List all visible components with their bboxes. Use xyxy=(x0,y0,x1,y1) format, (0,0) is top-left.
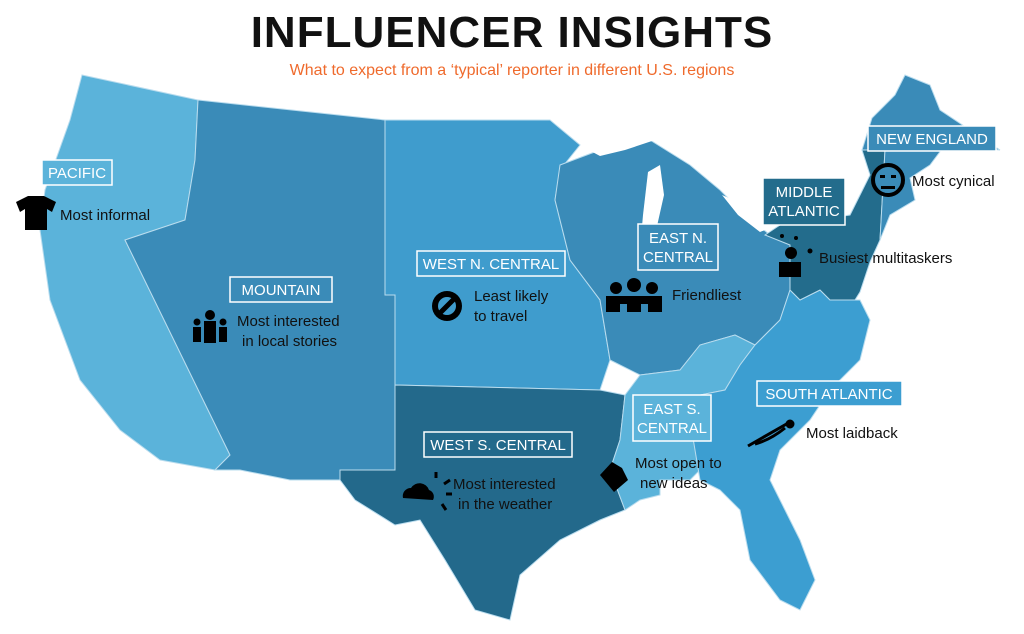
text: middle atlantic: Busiest multitaskers xyxy=(819,250,952,267)
region: east south central xyxy=(610,335,755,510)
label: new england xyxy=(868,126,996,151)
text: new england: Most cynical xyxy=(912,173,995,190)
icon: snapping hand xyxy=(600,462,628,492)
label: west n central xyxy=(417,251,565,276)
text: west n central: Least likely xyxy=(474,288,549,305)
label: west s central: WEST S. CENTRAL xyxy=(430,437,566,454)
label: east n central xyxy=(638,224,718,270)
region: east north central xyxy=(555,140,790,375)
subtitle: What to expect from a ‘typical’ reporter in different U.S. regions xyxy=(290,62,734,79)
label: middle atlantic: MIDDLE xyxy=(776,184,832,201)
map: to travel xyxy=(474,308,527,325)
title: INFLUENCER INSIGHTS xyxy=(251,8,773,57)
region: west north central xyxy=(385,120,610,390)
region: pacific xyxy=(40,75,230,470)
text: east n central: Friendliest xyxy=(672,287,742,304)
icon: shirt xyxy=(16,196,56,230)
label: mountain: MOUNTAIN xyxy=(242,282,320,299)
text: west s central: Most interested xyxy=(453,476,556,493)
label: east s central xyxy=(633,395,711,441)
text: pacific: Most informal xyxy=(60,207,150,224)
text: east s central: Most open to xyxy=(635,455,722,472)
icon: hammock xyxy=(748,421,793,446)
label: east s central: CENTRAL xyxy=(637,420,707,437)
label: east n central: EAST N. xyxy=(649,230,707,247)
region: new england xyxy=(862,75,1000,240)
label: east s central: EAST S. xyxy=(643,401,701,418)
map: in local stories xyxy=(242,333,337,350)
region: west south central xyxy=(340,385,625,620)
label: south atlantic: SOUTH ATLANTIC xyxy=(765,386,893,403)
label: pacific: PACIFIC xyxy=(48,165,106,182)
icon: people xyxy=(193,310,227,343)
icon: friends xyxy=(606,278,662,312)
label: west n central: WEST N. CENTRAL xyxy=(423,256,559,273)
text: mountain: Most interested xyxy=(237,313,340,330)
text: south atlantic: Most laidback xyxy=(806,425,898,442)
label: west s central xyxy=(424,432,572,457)
icon: weather xyxy=(403,472,452,510)
label: middle atlantic xyxy=(763,178,845,225)
region: south atlantic xyxy=(690,290,870,610)
icon: no symbol xyxy=(432,291,462,321)
label: new england: NEW ENGLAND xyxy=(876,131,988,148)
icon: multitasker xyxy=(779,234,812,277)
label: mountain xyxy=(230,277,332,302)
map: new ideas xyxy=(640,475,708,492)
label: middle atlantic: ATLANTIC xyxy=(768,203,840,220)
map: in the weather xyxy=(458,496,552,513)
label: pacific xyxy=(42,160,112,185)
lakes xyxy=(585,132,770,255)
region: middle atlantic xyxy=(765,150,885,300)
region: mountain xyxy=(125,100,395,480)
icon: face xyxy=(873,165,903,195)
label: south atlantic xyxy=(757,381,902,406)
label: east n central: CENTRAL xyxy=(643,249,713,266)
